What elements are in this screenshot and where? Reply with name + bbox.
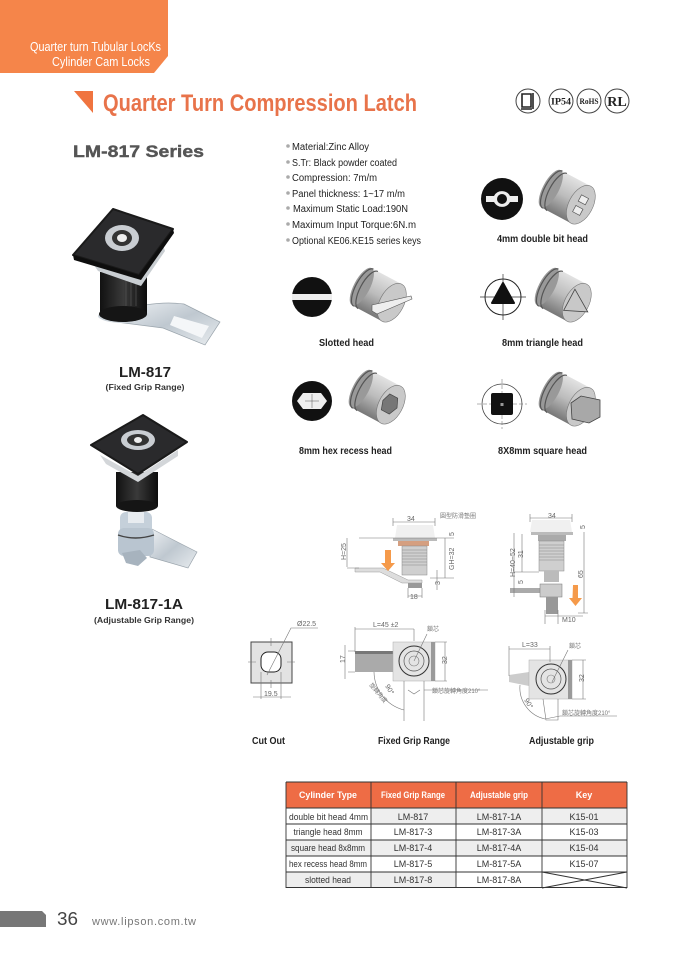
- table rows: slotted head: [305, 875, 351, 885]
- drawing: adjustable grip side view: 31: [518, 550, 525, 558]
- product label: LM-817-1A: [94, 596, 194, 625]
- header banner: Quarter turn Tubular LocKs: [30, 39, 161, 54]
- specification list: Material:Zinc Alloy: [292, 142, 369, 153]
- icon: double bit cylinder: [534, 166, 601, 229]
- table rows: K15-01: [569, 812, 599, 822]
- title: Quarter Turn Compression Latch: [103, 90, 417, 117]
- drawing: adjustable grip side view: M10: [562, 617, 576, 624]
- drawing: cut out: 19.5: [264, 691, 278, 698]
- table header: Cylinder Type: [299, 790, 357, 800]
- drawing: adjustable grip side view: H=40~52: [510, 548, 517, 577]
- head option: square: [477, 368, 601, 457]
- icon: triangle cylinder: [530, 264, 599, 328]
- icon: RoHS: RoHS: [580, 97, 599, 106]
- table rows: LM-817-8A: [477, 875, 521, 885]
- table rows: square head 8x8mm: [291, 843, 365, 853]
- drawing: fixed grip side view: 5: [449, 532, 456, 536]
- drawing: fixed grip side view: 18: [410, 594, 418, 601]
- drawing: fixed grip rear view: 32: [442, 656, 449, 664]
- icon: RL: RL: [607, 95, 627, 110]
- drawing: adjustable grip rear view: 鎖芯: [569, 642, 581, 650]
- drawing: fixed grip rear view: 17: [340, 655, 347, 663]
- table header: Fixed Grip Range: [381, 790, 445, 800]
- label: Slotted head: [319, 338, 374, 349]
- drawing: fixed grip side view: 圓型防滑墊圈: [440, 512, 476, 520]
- spec table: [286, 782, 627, 888]
- table rows: K15-07: [569, 859, 599, 869]
- table grid: [286, 782, 627, 888]
- table rows: K15-03: [569, 827, 599, 837]
- product label: LM-817-1A: LM-817-1A: [105, 596, 183, 613]
- arrow: compression direction: [381, 550, 395, 571]
- page number: 36: [57, 909, 78, 929]
- icon: square end view: [477, 379, 527, 429]
- drawing: fixed grip rear view: 旋轉角度: [367, 681, 389, 705]
- icon: slot: [372, 296, 412, 314]
- table rows: LM-817-5: [394, 859, 432, 869]
- series heading: LM-817 Series: [73, 142, 204, 161]
- certification icons: [516, 89, 629, 113]
- drawing: adjustable grip side view: 5: [580, 525, 587, 529]
- drawing: adjustable grip rear view: 90°: [522, 697, 535, 710]
- table rows: LM-817-3: [394, 827, 432, 837]
- drawing: adjustable grip side view: 65: [578, 570, 585, 578]
- icon: slotted cylinder: [345, 264, 412, 327]
- head option: triangle: [480, 264, 599, 349]
- specification list: Optional KE06.KE15 series keys: [292, 236, 421, 247]
- specification list: Maximum Static Load:190N: [293, 204, 408, 215]
- specification list: Compression: 7m/m: [292, 173, 377, 184]
- table header: [286, 782, 627, 808]
- head option: double bit: [481, 166, 601, 245]
- drawing: fixed grip side view: 34: [407, 516, 415, 523]
- specification list: [286, 142, 421, 247]
- header banner: [0, 0, 168, 73]
- table rows: LM-817-5A: [477, 859, 521, 869]
- icon: square cylinder: [534, 368, 601, 431]
- icon: hex end view: [292, 381, 332, 421]
- table rows: LM-817-1A: [477, 812, 521, 822]
- arrow: compression direction: [569, 585, 582, 606]
- label: adjustable grip: Adjustable grip: [529, 736, 594, 747]
- header banner: Cylinder Cam Locks: [52, 54, 150, 69]
- drawing: adjustable grip side view: [510, 513, 588, 624]
- table rows: LM-817: [398, 812, 428, 822]
- table rows: LM-817-3A: [477, 827, 521, 837]
- drawing: cut out: [248, 621, 318, 699]
- product label: LM-817: (Fixed Grip Range): [106, 383, 185, 392]
- icon: IP54: IP54: [551, 96, 572, 106]
- table rows: hex recess head 8mm: [289, 859, 367, 869]
- label: fixed grip range: Fixed Grip Range: [378, 736, 450, 747]
- drawing: fixed grip rear view: 鎖芯: [427, 625, 439, 633]
- drawing: fixed grip side view: H=25: [341, 543, 348, 560]
- table rows: triangle head 8mm: [294, 827, 362, 837]
- drawing: fixed grip rear view: L=45 ±2: [373, 622, 399, 629]
- drawing: fixed grip side view: [341, 512, 476, 601]
- table rows: [289, 812, 599, 885]
- table row fills: [286, 808, 627, 888]
- product label: LM-817-1A: (Adjustable Grip Range): [94, 616, 194, 625]
- table rows: K15-04: [569, 843, 599, 853]
- table header: Adjustable grip: [470, 790, 528, 800]
- drawing: adjustable grip rear view: [509, 642, 617, 720]
- drawing: fixed grip rear view: 鎖芯旋轉角度210°: [432, 687, 481, 695]
- table rows: LM-817-8: [394, 875, 432, 885]
- head option: hex recess: [292, 366, 411, 457]
- photo: LM-817 latch: [73, 209, 220, 345]
- label: cut out: Cut Out: [252, 736, 286, 747]
- head option: slotted: [292, 264, 412, 349]
- drawing: adjustable grip rear view: 鎖芯旋轉角度210°: [562, 709, 611, 717]
- drawing: adjustable grip side view: 34: [548, 513, 556, 520]
- product label: LM-817: [106, 364, 185, 392]
- label: 8mm triangle head: [502, 338, 583, 349]
- drawing: adjustable grip rear view: L=33: [522, 642, 538, 649]
- icon: triangle end view: [480, 274, 526, 320]
- specification list: Panel thickness: 1~17 m/m: [292, 189, 405, 200]
- specification list: Maximum Input Torque:6N.m: [292, 220, 416, 231]
- icon: square stub: [571, 396, 600, 423]
- drawing: fixed grip side view: GH=32: [449, 548, 456, 570]
- table rows: LM-817-4: [394, 843, 432, 853]
- drawing: adjustable grip side view: 5: [518, 580, 525, 584]
- photo: LM-817-1A latch: [91, 415, 197, 568]
- label: 8mm hex recess head: [299, 446, 392, 457]
- drawing: fixed grip rear view: 90°: [383, 683, 396, 696]
- drawing: adjustable grip rear view: 32: [579, 674, 586, 682]
- icon: hex cylinder: [344, 366, 411, 429]
- icon: panel seal: [516, 89, 540, 113]
- drawing: fixed grip rear view: [340, 622, 488, 721]
- label: 4mm double bit head: [497, 234, 588, 245]
- title marker triangle: [74, 91, 93, 113]
- footer page tab: [0, 911, 46, 927]
- icon: slotted end view: [292, 277, 332, 317]
- label: 8X8mm square head: [498, 446, 587, 457]
- website: www.lipson.com.tw: [91, 916, 196, 928]
- icon: double bit end view: [481, 178, 523, 220]
- drawing: cut out: Ø22.5: [297, 621, 316, 628]
- product label: LM-817: LM-817: [119, 364, 171, 381]
- table rows: LM-817-4A: [477, 843, 521, 853]
- specification list: S.Tr: Black powder coated: [292, 158, 397, 169]
- table header: Key: [576, 790, 592, 800]
- drawing: fixed grip side view: 3: [435, 581, 442, 585]
- table rows: double bit head 4mm: [289, 812, 368, 822]
